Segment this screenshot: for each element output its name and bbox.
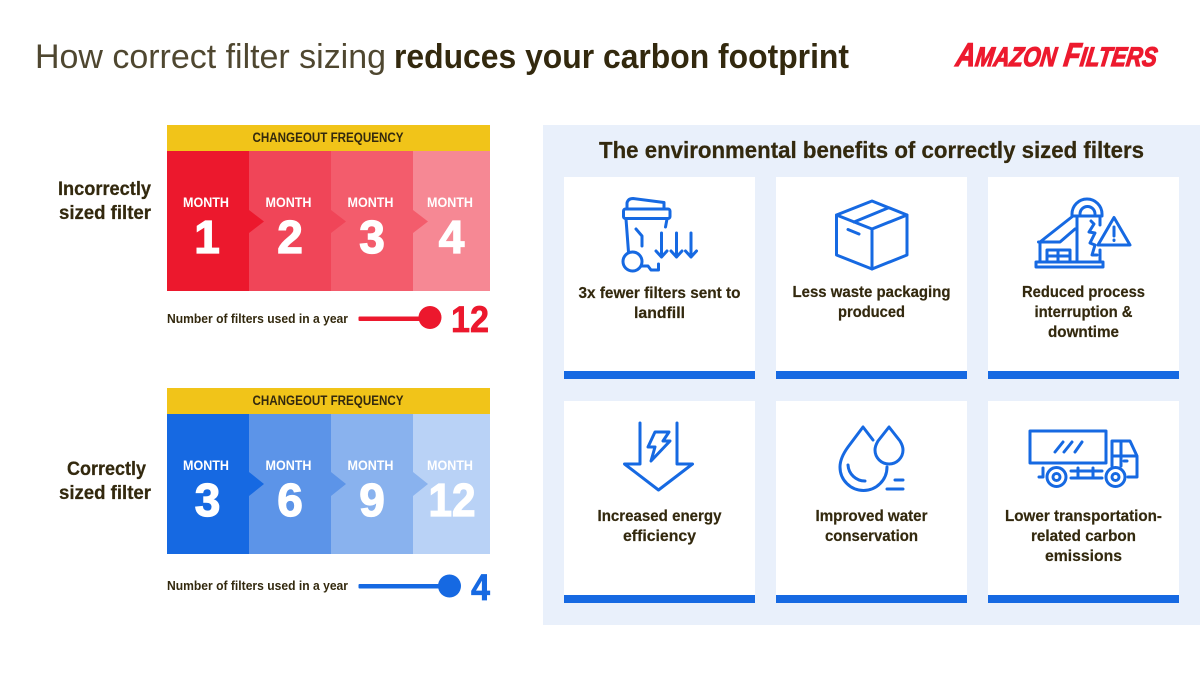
month timeline: red: 4 — [439, 211, 465, 263]
label: incorrectly sized filter: sized filter — [59, 203, 152, 224]
caption: Reduced process — [1022, 284, 1145, 301]
icon: water drops — [840, 427, 903, 490]
logo: Amazon Filters: AMAZON FILTERS — [953, 37, 1160, 74]
month timeline: red: MONTH — [348, 195, 394, 210]
caption: Less waste packaging — [792, 284, 950, 301]
month timeline: blue: MONTH — [183, 458, 229, 473]
caption: Increased energy — [598, 508, 722, 525]
icon: truck — [1030, 431, 1137, 486]
month timeline: blue: MONTH — [427, 458, 473, 473]
filters used per year: 4: 4 — [471, 567, 490, 608]
card: transportation — [988, 401, 1179, 603]
icon: cardboard box — [836, 201, 907, 269]
caption: produced — [838, 304, 905, 321]
filters used per year: 12: Number of filters used in a year — [167, 312, 348, 326]
card: energy — [564, 401, 755, 603]
month timeline: blue: 9 — [359, 474, 385, 526]
filters used per year: 12 — [167, 299, 489, 340]
card: water — [776, 401, 967, 603]
month timeline: red: MONTH — [266, 195, 312, 210]
icon: down arrow with bolt — [624, 423, 692, 490]
card: packaging — [776, 177, 967, 379]
card: downtime — [988, 177, 1179, 379]
title: reduces your carbon footprint — [394, 38, 849, 76]
icon: waste bin with arrows — [623, 198, 696, 271]
label: correctly sized filter: Correctly — [67, 459, 146, 480]
month timeline: blue: 3 — [195, 474, 220, 526]
month timeline: red: 3 — [359, 211, 385, 263]
month timeline: red — [167, 151, 490, 291]
label: incorrectly sized filter: Incorrectly — [58, 179, 151, 200]
header: changeout frequency — [167, 125, 490, 151]
month timeline: red: 2 — [277, 211, 303, 263]
filters used per year: 12: 12 — [451, 299, 489, 340]
caption: related carbon — [1031, 528, 1136, 545]
filters used per year: 4 — [167, 567, 490, 608]
header: changeout frequency: CHANGEOUT FREQUENCY — [252, 130, 404, 145]
header: changeout frequency: CHANGEOUT FREQUENCY — [252, 393, 404, 408]
caption: emissions — [1045, 548, 1122, 565]
caption: conservation — [825, 528, 918, 545]
caption: 3x fewer filters sent to — [578, 285, 741, 302]
month timeline: red: 1 — [194, 211, 220, 263]
month timeline: blue: MONTH — [266, 458, 312, 473]
filters used per year: 4: Number of filters used in a year — [167, 579, 348, 593]
month timeline: blue — [167, 414, 490, 554]
icon: plant with warning — [1036, 199, 1130, 267]
month timeline: blue: 6 — [277, 474, 303, 526]
label: correctly sized filter: sized filter — [59, 483, 152, 504]
caption: efficiency — [623, 528, 696, 545]
month timeline: red: MONTH — [427, 195, 473, 210]
month timeline: blue: 12 — [428, 474, 476, 526]
benefits heading: The environmental benefits of correctly sized filters — [599, 137, 1144, 163]
card: landfill — [564, 177, 755, 379]
month timeline: red: MONTH — [183, 195, 229, 210]
caption: downtime — [1048, 324, 1119, 341]
month timeline: blue: MONTH — [348, 458, 394, 473]
panel: environmental benefits — [543, 125, 1200, 625]
panel: correctly sized filter — [59, 388, 490, 608]
panel: incorrectly sized filter — [58, 125, 490, 340]
caption: landfill — [634, 305, 685, 322]
title: How correct filter sizing — [35, 38, 386, 76]
caption: Improved water — [816, 508, 928, 525]
header: changeout frequency — [167, 388, 490, 414]
caption: interruption & — [1034, 304, 1133, 321]
caption: Lower transportation- — [1005, 508, 1162, 525]
